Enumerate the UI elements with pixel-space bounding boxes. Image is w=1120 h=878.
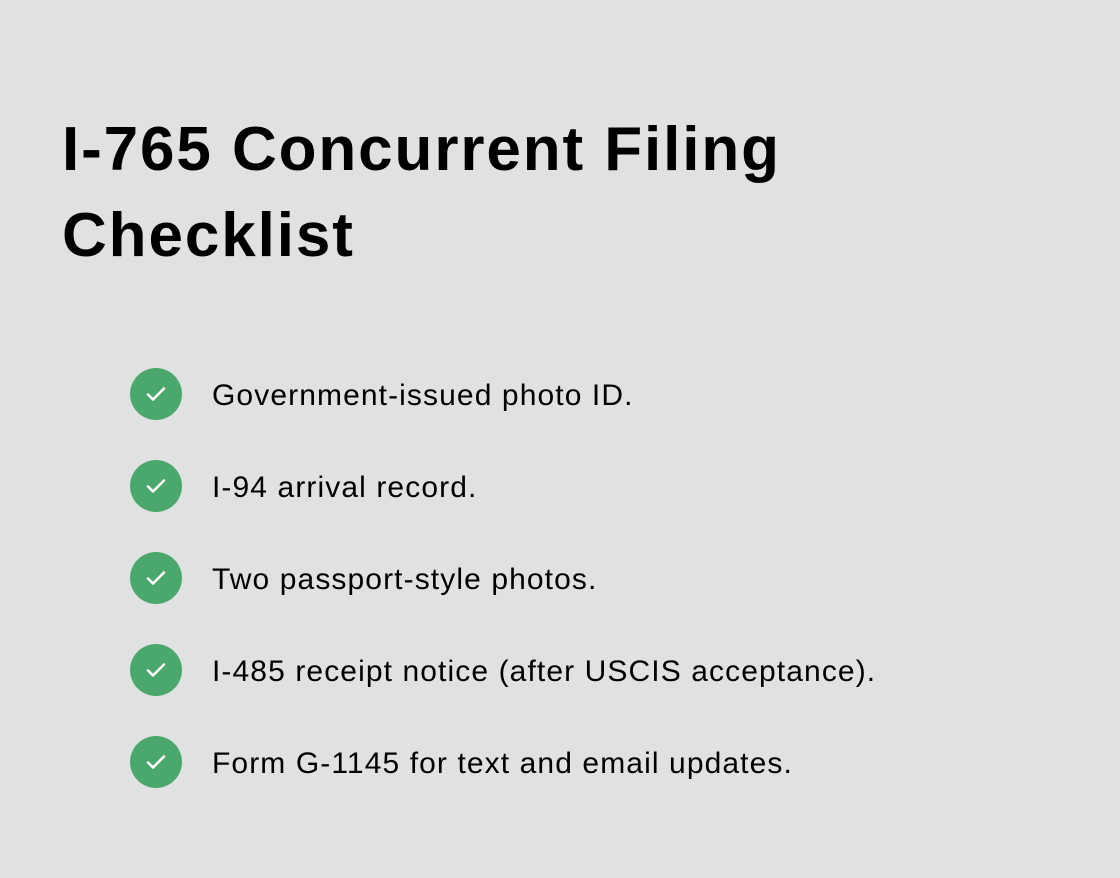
item 4 [130,644,876,696]
item 1 [130,368,634,420]
item 1: Government-issued photo ID. [212,379,634,412]
item 2: I-94 arrival record. [212,471,477,504]
item 2 [130,460,477,512]
title: Checklist [62,201,355,270]
item 5: Form G-1145 for text and email updates. [212,747,793,780]
item 3 [130,552,597,604]
title [62,115,781,270]
checklist [130,368,876,788]
item 3: Two passport-style photos. [212,563,597,596]
item 4: I-485 receipt notice (after USCIS acceptance). [212,655,876,688]
item 5 [130,736,793,788]
title: I-765 Concurrent Filing [62,115,781,184]
